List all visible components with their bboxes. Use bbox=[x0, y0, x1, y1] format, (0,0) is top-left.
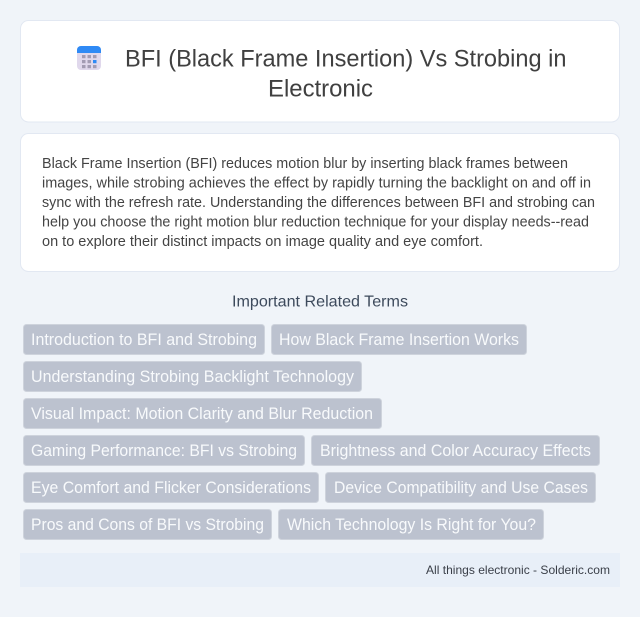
panel: related term chips bbox=[24, 324, 600, 540]
chip: visual impact bbox=[24, 398, 382, 428]
chip: brightness and color: Brightness and Color Accuracy Effects bbox=[320, 442, 591, 460]
panel: title card bbox=[20, 20, 620, 122]
chip: how BFI works bbox=[272, 324, 526, 354]
chip: eye comfort: Eye Comfort and Flicker Considerations bbox=[31, 479, 311, 497]
chip: gaming performance: Gaming Performance: BFI vs Strobing bbox=[31, 442, 297, 460]
chip: strobing backlight bbox=[24, 362, 362, 392]
chip: device compatibility: Device Compatibility and Use Cases bbox=[334, 479, 588, 497]
chip: which technology: Which Technology Is Right for You? bbox=[287, 516, 536, 534]
chip: which technology bbox=[278, 510, 544, 540]
chip: brightness and color bbox=[312, 436, 600, 466]
text block: paragraph bbox=[42, 155, 595, 250]
footer: All things electronic - Solderic.com bbox=[426, 563, 610, 577]
footer bbox=[20, 553, 620, 587]
icon: calendar bbox=[77, 46, 101, 70]
text block: paragraph: help you choose the right motion blur reduction technique for your display needs--read bbox=[42, 214, 589, 230]
chip: introduction bbox=[24, 324, 264, 354]
chip: how BFI works: How Black Frame Insertion Works bbox=[279, 331, 519, 349]
chip: introduction: Introduction to BFI and Strobing bbox=[31, 331, 257, 349]
chip: gaming performance bbox=[24, 436, 304, 466]
chip: pros and cons bbox=[24, 510, 272, 540]
heading: important related terms: Important Related Terms bbox=[232, 294, 408, 310]
text block: paragraph: Black Frame Insertion (BFI) reduces motion blur by inserting black frames between bbox=[42, 155, 568, 172]
chip: eye comfort bbox=[24, 472, 318, 502]
chip: strobing backlight: Understanding Strobing Backlight Technology bbox=[31, 368, 355, 386]
chip: device compatibility bbox=[326, 472, 596, 502]
title bbox=[125, 46, 566, 102]
text block: paragraph: images, while strobing achieves the effect by rapidly turning the backlight on and off in bbox=[42, 174, 591, 191]
chip: pros and cons: Pros and Cons of BFI vs Strobing bbox=[31, 516, 264, 534]
text block: paragraph: sync with the refresh rate. Understanding the differences between BFI and strobing can bbox=[42, 194, 595, 211]
title: BFI (Black Frame Insertion) Vs Strobing in bbox=[125, 46, 566, 72]
title: Electronic bbox=[268, 76, 373, 102]
text block: paragraph: on to explore their distinct impacts on image quality and eye comfort. bbox=[42, 233, 483, 250]
chip: visual impact: Visual Impact: Motion Clarity and Blur Reduction bbox=[31, 405, 373, 423]
panel: introduction text bbox=[20, 134, 620, 272]
